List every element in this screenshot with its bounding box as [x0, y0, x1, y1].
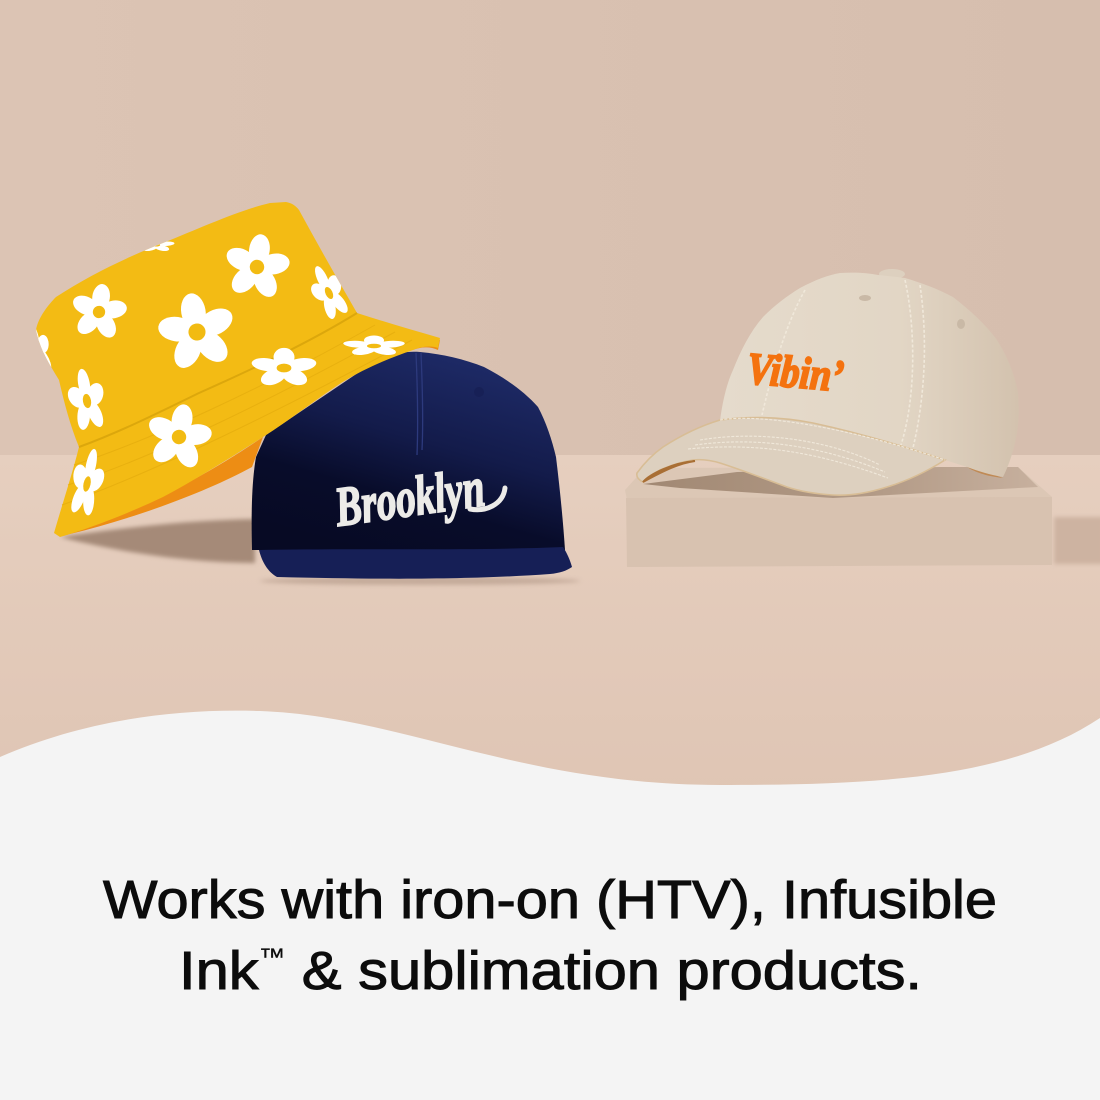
- cap seams: [762, 280, 924, 452]
- navy seams: [416, 353, 423, 455]
- pedestal box: [625, 467, 1052, 567]
- cap button: [879, 269, 905, 279]
- box shadow: [643, 467, 1038, 498]
- hat brim crease: [79, 313, 357, 447]
- navy brim: [259, 547, 572, 579]
- hat tip lining: [413, 340, 440, 350]
- brim underside: [643, 461, 695, 482]
- Vibin' logo: Vibin’: [745, 343, 846, 401]
- Brooklyn logo: Brooklyn: [330, 457, 488, 539]
- navy crown: [252, 352, 565, 550]
- cap brim: [637, 418, 945, 495]
- navy snapback cap: [252, 352, 572, 579]
- caption line 1: Works with iron-on (HTV), Infusible: [103, 870, 997, 930]
- brim stitching: [688, 418, 945, 478]
- shadow: hats on floor: [60, 517, 1100, 585]
- box top face: [625, 467, 1052, 500]
- navy eyelet: [474, 387, 484, 397]
- cap crown: [720, 273, 1019, 477]
- beige baseball cap: [637, 269, 1019, 495]
- white wave panel: [0, 711, 1100, 1100]
- hat brim ribs: [62, 325, 412, 505]
- hat flowers: [18, 230, 408, 522]
- cap eyelets: [859, 295, 965, 329]
- box front face: [626, 497, 1052, 567]
- caption line 2: ™: [259, 944, 285, 971]
- yellow bucket hat: [18, 202, 440, 537]
- caption line 2: Ink: [179, 941, 251, 1001]
- hat body: [36, 202, 440, 537]
- cap underside: [960, 462, 1003, 478]
- hat orange lining: [60, 437, 263, 537]
- caption line 2: & sublimation products.: [285, 941, 922, 1001]
- backdrop: wall and floor: [0, 0, 1100, 800]
- caption: [103, 870, 997, 1001]
